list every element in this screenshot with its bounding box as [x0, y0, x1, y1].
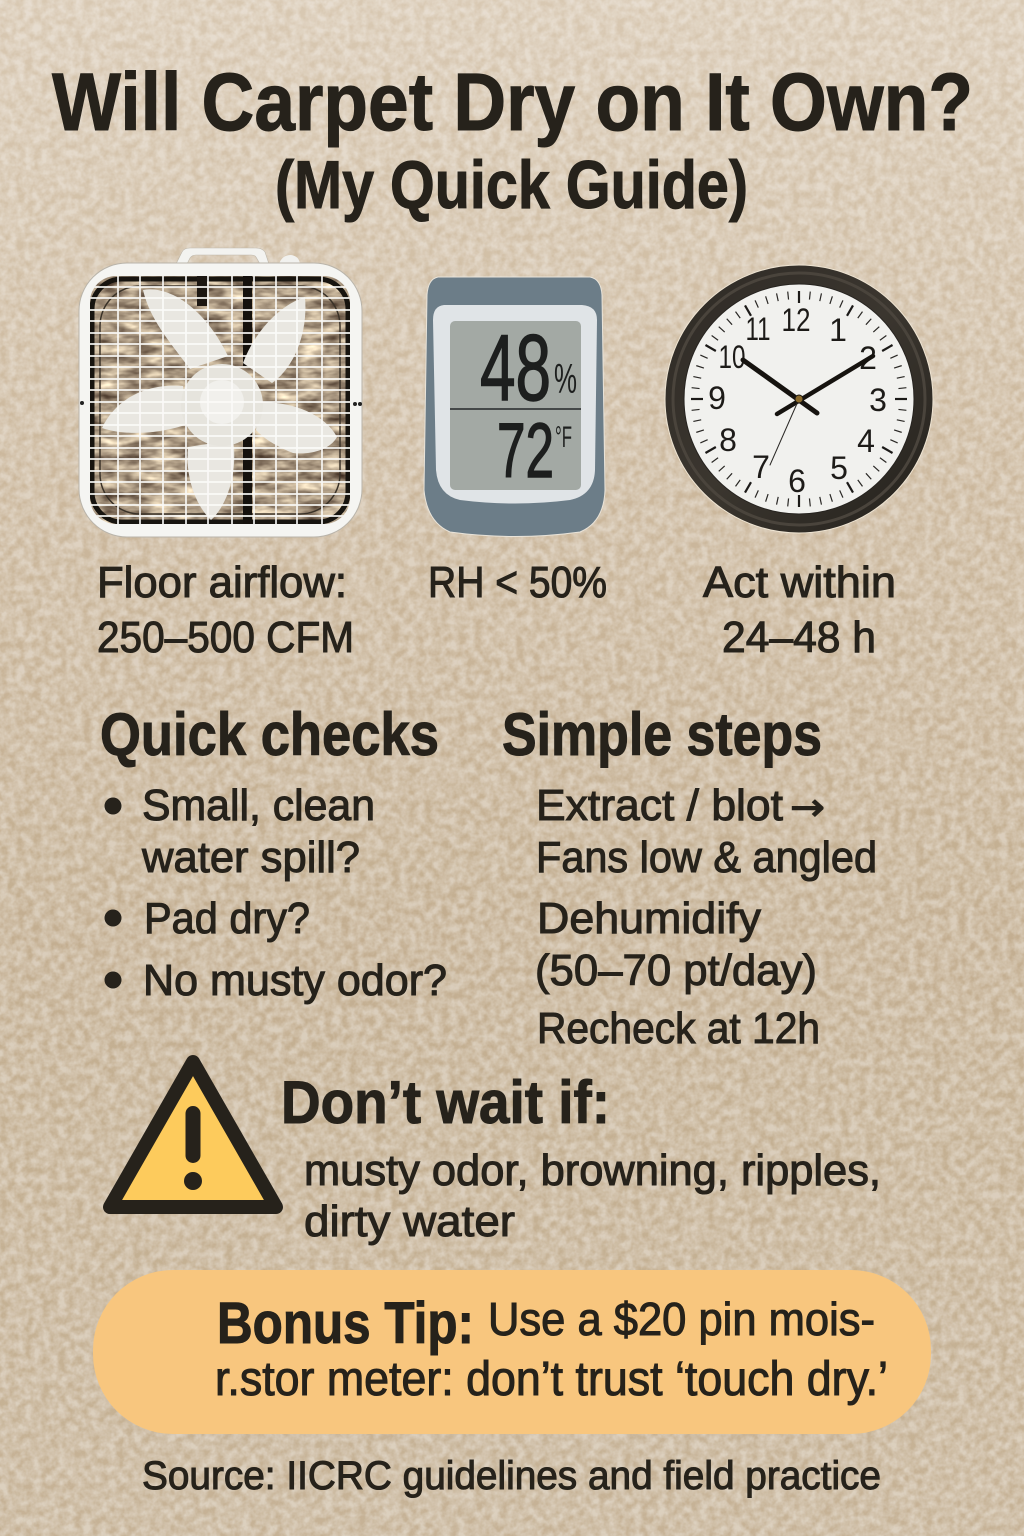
stat label: act within: 24–48 h: [722, 613, 876, 662]
warning block: don't wait if: [281, 1069, 881, 1246]
icon: wall clock: [665, 265, 933, 533]
heading: simple steps: Simple steps: [502, 701, 822, 768]
step: extract and fans: Fans low & angled: [536, 833, 877, 882]
fan handle: [176, 248, 269, 264]
callout: bonus tip: r.stor meter: don’t trust ‘touch dry.’: [215, 1353, 888, 1406]
icon: hygrometer: [424, 277, 605, 536]
clock numerals: 1: [829, 312, 847, 348]
stat label: act within: Act within: [703, 558, 896, 607]
title: [52, 57, 973, 223]
temperature reading: 72: [497, 408, 554, 494]
step: dehumidify: (50–70 pt/day): [535, 946, 817, 995]
check item: pad dry: Pad dry?: [144, 894, 310, 943]
check item: small clean spill: water spill?: [141, 833, 360, 882]
callout: bonus tip: Use a $20 pin mois-: [488, 1293, 875, 1345]
subtitle: (My Quick Guide): [275, 147, 748, 223]
panel: quick checks: [100, 701, 447, 1005]
clock numerals: 12: [782, 302, 810, 338]
clock numerals: 8: [719, 422, 737, 458]
clock numerals: 4: [857, 423, 875, 459]
clock numerals: 10: [718, 339, 746, 375]
stat label: floor airflow: 250–500 CFM: [97, 613, 354, 662]
humidity reading: 48: [480, 315, 551, 420]
heading: quick checks: Quick checks: [100, 701, 439, 768]
warning block: don't wait if: Don’t wait if:: [281, 1069, 610, 1136]
clock numerals: 7: [752, 449, 770, 485]
stat label: act within: [703, 558, 896, 662]
clock numerals: [708, 302, 887, 499]
clock numerals: 3: [869, 382, 887, 418]
clock hour ticks: [691, 291, 907, 507]
LCD display: [450, 321, 581, 490]
clock numerals: 6: [788, 463, 806, 499]
check item: small clean spill: [104, 781, 375, 882]
step: dehumidify: [535, 894, 817, 995]
icon: hygrometer: °F: [555, 421, 572, 454]
icon: box fan: [79, 248, 362, 537]
clock numerals: 2: [859, 340, 877, 376]
clock numerals: 11: [746, 311, 770, 347]
warning block: don't wait if: dirty water: [304, 1197, 515, 1246]
icon: warning triangle: [110, 1062, 276, 1207]
check item: no musty odor: No musty odor?: [143, 956, 447, 1005]
stat label: relative humidity: RH < 50%: [428, 558, 607, 607]
check item: small clean spill: Small, clean: [142, 781, 375, 830]
stat label: floor airflow: Floor airflow:: [97, 558, 347, 607]
warning block: don't wait if: musty odor, browning, ripples,: [304, 1146, 881, 1195]
step: recheck: Recheck at 12h: [537, 1004, 820, 1053]
clock minute ticks: [692, 292, 906, 506]
callout: bonus tip: [93, 1270, 931, 1434]
step: dehumidify: Dehumidify: [537, 894, 761, 943]
clock hands: [743, 356, 873, 465]
callout: bonus tip: Bonus Tip:: [217, 1291, 474, 1356]
clock numerals: 5: [830, 450, 848, 486]
step: extract and fans: [536, 781, 877, 882]
fan grille: [90, 276, 350, 524]
panel: simple steps: [502, 701, 877, 1053]
icon: hygrometer: %: [554, 355, 577, 402]
fan blades: [102, 289, 337, 520]
step: extract and fans: →: [790, 785, 825, 829]
clock numerals: 9: [708, 380, 726, 416]
stat label: floor airflow: [97, 558, 354, 662]
source line: Source: IICRC guidelines and field practice: [142, 1454, 881, 1498]
step: extract and fans: Extract / blot: [536, 781, 783, 830]
